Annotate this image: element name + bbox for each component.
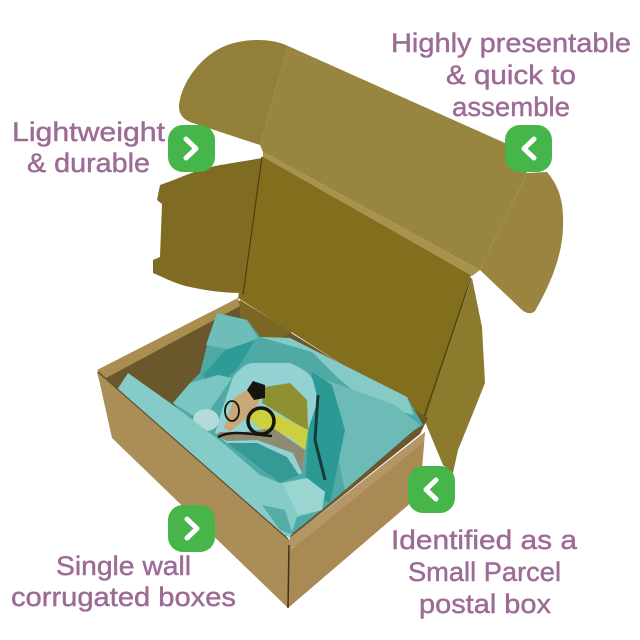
label: single wall: Single wall: [56, 551, 191, 581]
box front-left wall: [97, 372, 290, 608]
right flap: [423, 278, 485, 473]
lid: main panel: [260, 46, 527, 270]
box front-right wall: [288, 432, 425, 608]
dark fold beside mug: [315, 395, 325, 480]
button: single wall: [168, 505, 215, 552]
lid: left tab: [179, 40, 288, 145]
label: small parcel: Small Parcel: [408, 557, 561, 587]
mug: [193, 363, 325, 483]
cardboard box: [97, 40, 563, 608]
label: small parcel: [391, 525, 578, 619]
label: highly presentable: [391, 28, 631, 122]
label: highly presentable: & quick to: [446, 60, 576, 90]
inner back panel: [238, 152, 480, 418]
box back-left rim: [97, 298, 240, 378]
label: single wall: [11, 551, 236, 612]
label: small parcel: Identified as a: [391, 525, 578, 555]
label: lightweight: Lightweight: [12, 117, 166, 147]
mug handle: [193, 409, 219, 431]
label: small parcel: postal box: [419, 589, 552, 619]
tissue roll: [117, 373, 325, 538]
mug base: [227, 443, 299, 483]
label: highly presentable: assemble: [452, 92, 570, 122]
box back-right wall: [240, 300, 292, 345]
label: highly presentable: Highly presentable: [391, 28, 631, 58]
cyclist: [218, 381, 274, 437]
mug meadow: [262, 383, 308, 430]
button: small parcel: [408, 466, 455, 513]
button: presentable: [505, 125, 552, 172]
label: single wall: corrugated boxes: [11, 582, 236, 612]
mug body: [215, 363, 318, 483]
mug road: [215, 428, 305, 473]
box interior: [97, 300, 428, 538]
tissue paper back: [173, 313, 423, 538]
button: lightweight: [168, 125, 215, 172]
lid: right tab: [480, 172, 563, 313]
label: lightweight: & durable: [27, 148, 150, 178]
label: lightweight: [12, 117, 166, 178]
inner left flap: [153, 158, 262, 293]
